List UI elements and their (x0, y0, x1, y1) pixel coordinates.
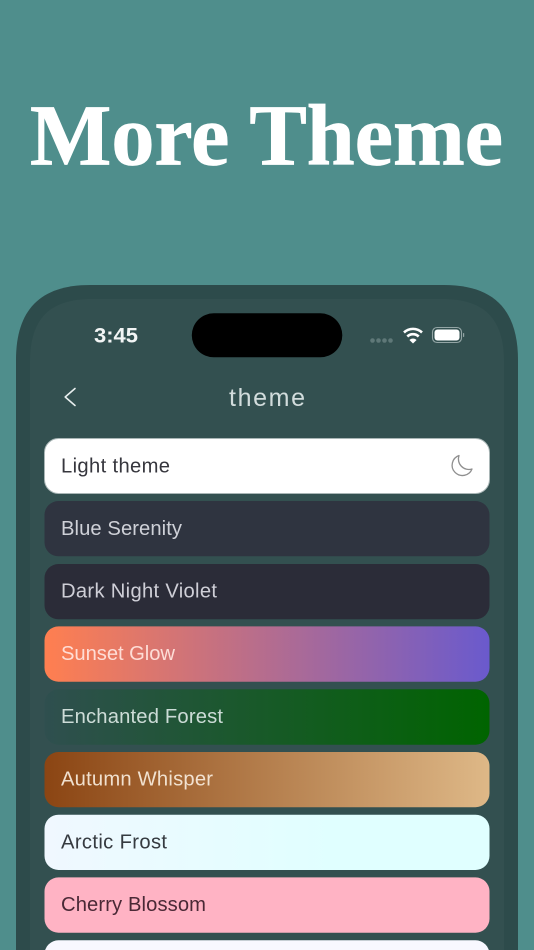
theme: Enchanted Forest: Enchanted Forest (61, 706, 223, 728)
nav bar (65, 384, 305, 412)
theme: Autumn Whisper: Autumn Whisper (61, 769, 213, 791)
phone screen (30, 299, 504, 950)
theme list (44, 438, 490, 950)
theme: Enchanted Forest (44, 689, 490, 745)
phone bezel (16, 285, 518, 950)
theme: cropped last row (44, 940, 490, 950)
theme: Autumn Whisper (44, 752, 490, 807)
signal dots (370, 338, 393, 343)
theme: Cherry Blossom: Cherry Blossom (61, 894, 206, 916)
theme: Light theme: Light theme (61, 455, 170, 477)
icon: moon (452, 456, 472, 476)
theme: Sunset Glow: Sunset Glow (61, 643, 175, 665)
icon: battery (432, 328, 464, 342)
theme: Light theme (44, 438, 490, 494)
theme: Blue Serenity: Blue Serenity (61, 518, 183, 540)
theme: Cherry Blossom (44, 877, 490, 933)
theme: Arctic Frost: Arctic Frost (61, 831, 167, 853)
status bar (94, 313, 464, 357)
dynamic island (192, 313, 342, 357)
title: More Theme (30, 86, 503, 184)
theme: Dark Night Violet: Dark Night Violet (61, 580, 217, 602)
screen title: theme (229, 384, 305, 412)
theme: Sunset Glow (44, 626, 490, 682)
icon: wifi (404, 329, 422, 344)
theme: Arctic Frost (44, 815, 490, 870)
icon: back arrow (65, 388, 75, 406)
phone frame (16, 285, 518, 950)
theme: Dark Night Violet (44, 564, 490, 619)
theme: Blue Serenity (44, 501, 490, 556)
clock: 3:45 (94, 324, 138, 347)
